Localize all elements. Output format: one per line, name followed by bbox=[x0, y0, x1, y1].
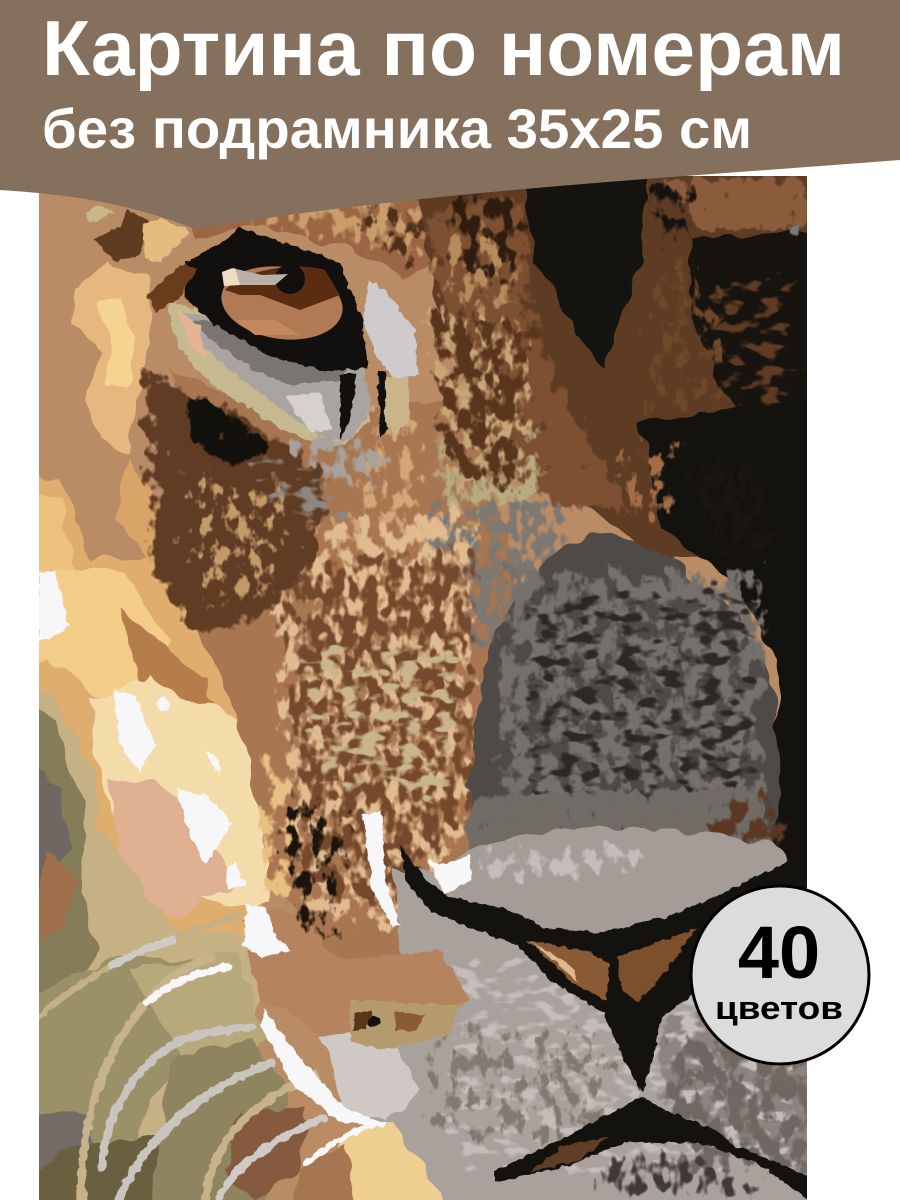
upper lip light fur bbox=[454, 826, 788, 930]
lion eye bbox=[148, 228, 400, 490]
painting: lion face paint by numbers bbox=[20, 170, 830, 1200]
left side fur and background bbox=[39, 476, 351, 1200]
brown centre fur bbox=[170, 170, 520, 1000]
eye-side golden glow bbox=[71, 261, 172, 586]
whiskers bbox=[39, 915, 385, 1200]
grey fur right of eye bbox=[362, 280, 418, 435]
badge label: цветов bbox=[715, 990, 843, 1026]
badge number: 40 bbox=[738, 911, 820, 994]
white highlights bbox=[39, 570, 290, 958]
bottom gold fur bbox=[290, 1125, 440, 1200]
dark fur patch on brow bbox=[85, 205, 190, 262]
mouth and nose lines bbox=[352, 840, 830, 1200]
banner bbox=[0, 0, 900, 229]
fur speckles in centre bbox=[250, 220, 570, 960]
chin fur below nose bbox=[593, 1148, 760, 1200]
badge: 40 colours bbox=[691, 886, 869, 1064]
subtitle: без подрамника 35х25 см bbox=[42, 97, 752, 160]
title: Картина по номерам bbox=[42, 4, 845, 92]
grey muzzle bbox=[465, 535, 790, 860]
white muzzle highlights bbox=[363, 810, 472, 928]
upper right dark mane bbox=[410, 170, 830, 880]
dark fur under eye bbox=[140, 360, 360, 640]
lower face grey fur bbox=[320, 870, 830, 1200]
